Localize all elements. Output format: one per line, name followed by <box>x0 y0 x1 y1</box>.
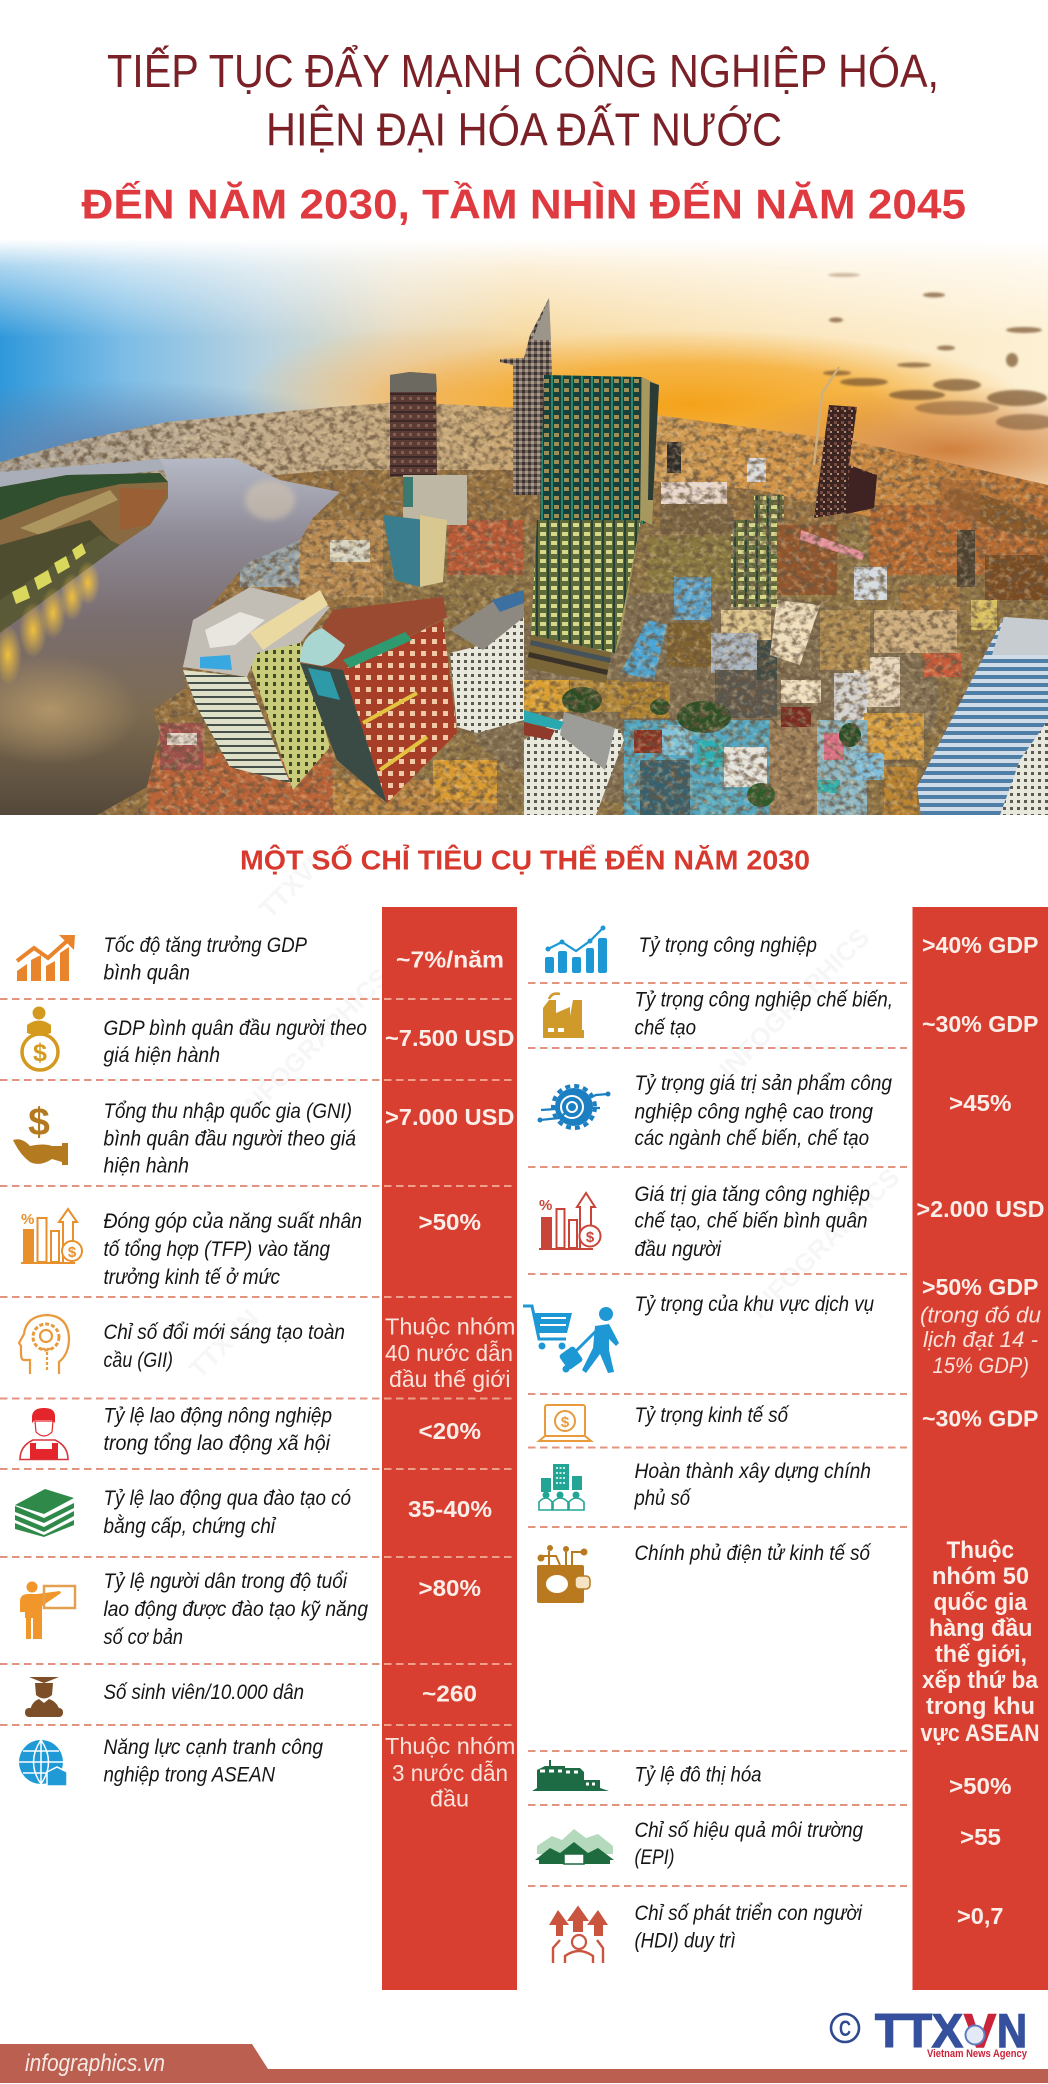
value: đầu <box>430 1786 469 1812</box>
label: số cơ bản <box>104 1626 183 1649</box>
icon: hand with dollar <box>13 1101 68 1165</box>
label: giá hiện hành <box>104 1044 220 1067</box>
row: digital economy <box>539 1404 1038 1441</box>
value: ~7%/năm <box>396 946 504 972</box>
label: Tỷ lệ lao động nông nghiệp <box>104 1404 332 1428</box>
icon: blue bars with trend line <box>545 926 607 973</box>
row: GDP per capita <box>22 1006 514 1070</box>
panel: left indicator list <box>13 934 516 1812</box>
label: Chỉ số đổi mới sáng tạo toàn <box>104 1321 345 1344</box>
faint watermarks <box>183 843 905 1384</box>
label: Tỷ trọng giá trị sản phẩm công <box>634 1072 892 1095</box>
icon: gear circuit <box>538 1086 610 1128</box>
cream tower: roof <box>183 587 330 677</box>
far city <box>0 402 1048 517</box>
label: bình quân đầu người theo giá <box>104 1128 356 1150</box>
label: bằng cấp, chứng chỉ <box>104 1515 277 1538</box>
value: 3 nước dẫn <box>392 1760 508 1786</box>
label: Tỷ lệ đô thị hóa <box>634 1764 762 1786</box>
wordmark <box>875 2004 1027 2057</box>
value: đầu thế giới <box>389 1366 510 1392</box>
panel: left value column <box>382 907 517 1990</box>
icon: percent bars arrow <box>21 1209 82 1264</box>
icon: person with coin <box>22 1006 58 1070</box>
wordmark: TTX <box>875 2004 963 2057</box>
right mid block <box>940 480 980 520</box>
label: Tốc độ tăng trưởng GDP <box>104 934 307 957</box>
row: digital skills <box>20 1570 481 1649</box>
label: Tỷ trọng công nghiệp <box>638 934 817 957</box>
value: thế giới, <box>935 1641 1027 1668</box>
low-rise rooftops <box>147 442 1048 815</box>
label: cầu (GII) <box>104 1349 173 1372</box>
right row dividers <box>528 983 907 1886</box>
source label: infographics.vn <box>25 2050 165 2077</box>
icon: teacher at board <box>20 1582 75 1639</box>
icon: factory <box>543 994 584 1038</box>
row: EPI <box>535 1819 1001 1869</box>
value: trong khu <box>926 1693 1035 1720</box>
icon: red percent bars arrow <box>539 1193 600 1250</box>
row: TFP <box>21 1209 481 1289</box>
value: ~7.500 USD <box>385 1025 514 1051</box>
river reflections <box>0 626 21 682</box>
label: Số sinh viên/10.000 dân <box>104 1681 304 1704</box>
row: industry share <box>545 926 1038 973</box>
row: competitiveness <box>19 1733 516 1812</box>
clouds <box>823 273 1048 430</box>
label: chế tạo <box>634 1016 696 1040</box>
label: phủ số <box>634 1487 692 1510</box>
icon: cart and traveller <box>523 1306 619 1373</box>
icon: teal city and people <box>539 1464 584 1510</box>
value <box>920 1274 1041 1378</box>
faint watermarks: TTXVN <box>253 843 335 924</box>
label: Tỷ trọng kinh tế số <box>634 1404 790 1427</box>
icon: laptop with money bag: $ <box>561 1414 570 1431</box>
label: (EPI) <box>634 1846 674 1869</box>
row: e-government <box>537 1537 1040 1747</box>
label: (HDI) duy trì <box>634 1930 736 1952</box>
wordmark: N <box>997 2004 1027 2057</box>
label: Năng lực cạnh tranh công <box>104 1736 323 1759</box>
icon: head with gear bulb <box>19 1315 69 1374</box>
dark tower left <box>390 372 437 477</box>
value: >45% <box>949 1090 1012 1116</box>
icon: laptop with money bag <box>539 1405 591 1441</box>
row: agricultural labour <box>20 1404 481 1460</box>
icon: percent bars arrow: % <box>21 1211 34 1228</box>
row: manufacturing share <box>543 988 1038 1040</box>
value: ~30% GDP <box>922 1406 1038 1432</box>
label: Tỷ trọng công nghiệp chế biến, <box>634 988 893 1012</box>
row: trained labour <box>15 1487 492 1538</box>
value: (trong đó du <box>920 1302 1041 1328</box>
label: Chỉ số hiệu quả môi trường <box>634 1819 863 1842</box>
label: chế tạo, chế biến bình quân <box>634 1210 868 1232</box>
cream tower: right face <box>247 640 330 790</box>
row: value added <box>539 1183 1044 1261</box>
faint watermarks: INFOGRAPHICS <box>713 922 875 1084</box>
icon: globe and cube <box>19 1740 67 1786</box>
label: Giá trị gia tăng công nghiệp <box>634 1183 870 1206</box>
icon: worker <box>20 1408 68 1460</box>
crane <box>814 367 839 465</box>
label: Tỷ lệ lao động qua đào tạo có <box>104 1487 351 1510</box>
faint watermarks: TTXVN <box>183 1303 265 1384</box>
value: >0,7 <box>957 1903 1004 1929</box>
value: >50% GDP <box>922 1274 1038 1300</box>
value: Thuộc <box>946 1537 1014 1564</box>
logo: TTXVN <box>831 2004 1028 2060</box>
row: HDI <box>549 1902 1004 1963</box>
icon: rising bars chart <box>17 935 75 981</box>
value: >2.000 USD <box>916 1196 1044 1222</box>
label: lao động được đào tạo kỹ năng <box>104 1598 368 1621</box>
river <box>0 458 340 815</box>
row: GII <box>19 1314 516 1392</box>
label: tố tổng hợp (TFP) vào tăng <box>104 1238 330 1261</box>
value: >50% <box>418 1209 481 1235</box>
row: services <box>523 1274 1041 1378</box>
left row dividers <box>0 999 516 1725</box>
footer band <box>0 2044 1048 2083</box>
copyright mark: C <box>839 2016 851 2041</box>
globe accent <box>966 2026 984 2044</box>
label: trong tổng lao động xã hội <box>104 1432 331 1455</box>
value: >7.000 USD <box>385 1104 514 1130</box>
label: Chính phủ điện tử kinh tế số <box>634 1542 872 1565</box>
label: các ngành chế biến, chế tạo <box>634 1127 869 1150</box>
right dark towers <box>814 405 877 518</box>
row: GDP growth <box>17 934 504 984</box>
photo: city skyline and river <box>0 228 1048 815</box>
row: GNI <box>13 1100 514 1178</box>
row: urbanisation <box>532 1760 1012 1799</box>
title line 1: TIẾP TỤC ĐẨY MẠNH CÔNG NGHIỆP HÓA, <box>107 45 939 97</box>
value: 15% GDP) <box>932 1353 1029 1378</box>
icon: red percent bars arrow: $ <box>586 1229 595 1246</box>
value: nhóm 50 <box>932 1563 1029 1590</box>
value: Thuộc nhóm <box>385 1314 516 1340</box>
row: digital government <box>539 1460 871 1510</box>
value: <20% <box>418 1418 481 1444</box>
icon: green town <box>532 1760 609 1791</box>
faint watermarks: INFOGRAPHICS <box>233 962 395 1124</box>
value: xếp thứ ba <box>922 1667 1039 1694</box>
green main tower <box>540 375 652 525</box>
icon: people with arrows <box>549 1906 608 1963</box>
label: Tổng thu nhập quốc gia (GNI) <box>104 1100 352 1123</box>
value: >55 <box>960 1824 1001 1850</box>
subtitle: ĐẾN NĂM 2030, TẦM NHÌN ĐẾN NĂM 2045 <box>82 180 966 228</box>
value: 40 nước dẫn <box>385 1340 513 1366</box>
label: trưởng kinh tế ở mức <box>104 1266 280 1289</box>
value: lịch đạt 14 - <box>923 1327 1038 1352</box>
panel: right indicator list <box>523 926 1044 1963</box>
white lower building <box>524 714 624 815</box>
red building <box>300 663 387 803</box>
label: đầu người <box>634 1238 722 1261</box>
value: hàng đầu <box>929 1615 1032 1642</box>
label: nghiệp trong ASEAN <box>104 1764 276 1786</box>
panel: right value column <box>912 907 1048 1990</box>
title block <box>82 45 966 228</box>
row: high-tech share <box>538 1072 1012 1150</box>
section heading: MỘT SỐ CHỈ TIÊU CỤ THỂ ĐẾN NĂM 2030 <box>240 844 810 876</box>
label: Hoàn thành xây dựng chính <box>634 1460 871 1483</box>
beige block under dark tower <box>403 475 467 525</box>
icon: red percent bars arrow: % <box>539 1197 552 1214</box>
wordmark: V <box>964 2004 997 2057</box>
icon: graduate <box>25 1677 63 1717</box>
label: Tỷ trọng của khu vực dịch vụ <box>634 1293 874 1316</box>
label: bình quân <box>104 962 190 984</box>
label: GDP bình quân đầu người theo <box>104 1017 367 1040</box>
copyright mark <box>831 2014 859 2042</box>
podium stripes <box>526 635 611 683</box>
teal building <box>383 515 420 587</box>
label: nghiệp công nghệ cao trong <box>634 1100 873 1124</box>
Bitexco tower <box>500 298 552 495</box>
tagline: Vietnam News Agency <box>927 2048 1028 2060</box>
icon: wallet with circuit <box>537 1545 590 1603</box>
peninsula <box>0 473 168 546</box>
cream tower: left face <box>183 670 290 783</box>
row: students <box>25 1677 477 1717</box>
title line 2: HIỆN ĐẠI HÓA ĐẤT NƯỚC <box>266 104 782 156</box>
value: >80% <box>418 1575 481 1601</box>
faint watermarks: INFOGRAPHICS <box>743 1162 905 1324</box>
label: Chỉ số phát triển con người <box>634 1902 863 1925</box>
value: quốc gia <box>934 1589 1028 1616</box>
icon: hand with dollar: $ <box>28 1101 50 1144</box>
icon: houses <box>535 1829 614 1864</box>
value: ~30% GDP <box>922 1011 1038 1037</box>
label: Tỷ lệ người dân trong độ tuổi <box>104 1570 348 1593</box>
blue tower <box>917 617 1048 815</box>
label: hiện hành <box>104 1154 189 1178</box>
mid city base <box>97 470 870 815</box>
dome <box>300 628 345 666</box>
value: >50% <box>949 1773 1012 1799</box>
label: Đóng góp của năng suất nhân <box>104 1210 362 1233</box>
icon: percent bars arrow: $ <box>68 1244 77 1261</box>
value: >40% GDP <box>922 932 1038 958</box>
icon: person with coin: $ <box>33 1039 47 1067</box>
white building <box>450 617 524 733</box>
value: 35-40% <box>408 1496 492 1522</box>
value: Thuộc nhóm <box>385 1733 516 1759</box>
value: ~260 <box>422 1680 477 1706</box>
icon: books <box>15 1489 74 1537</box>
